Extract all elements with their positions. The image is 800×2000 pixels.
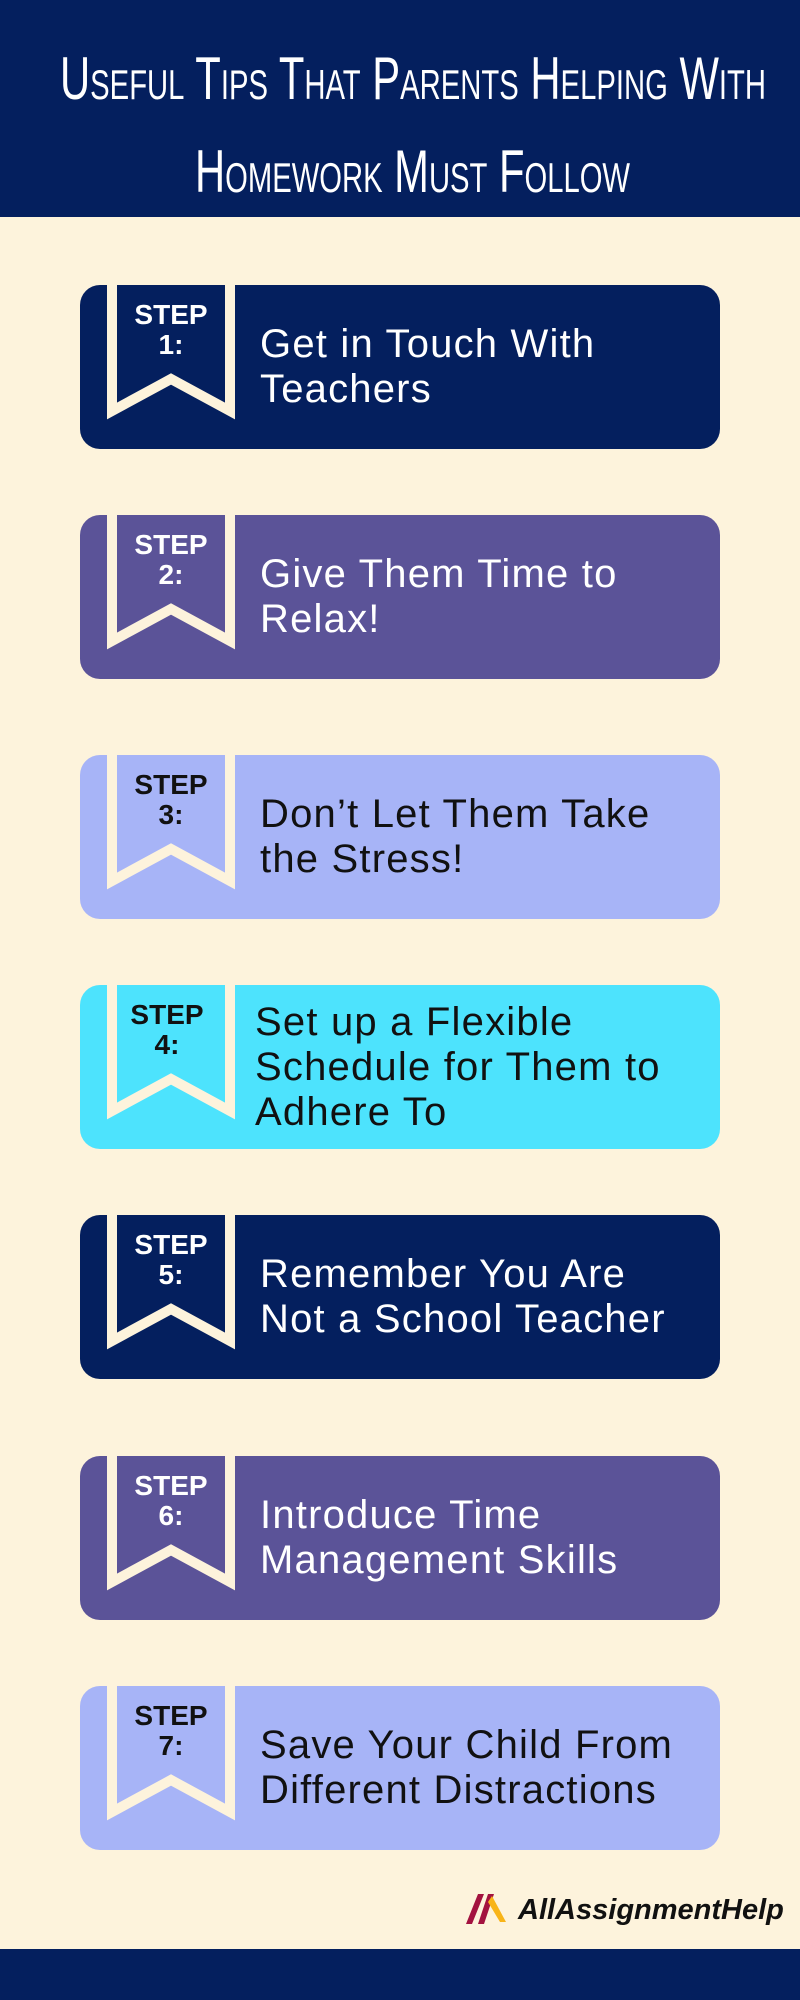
step label 7: 7:: [159, 1730, 183, 1761]
text 5: Not a School Teacher: [260, 1297, 666, 1341]
text 4: [255, 1000, 661, 1134]
card: step 6: [80, 1456, 720, 1620]
step label 7: STEP: [134, 1700, 208, 1731]
step label 4: 4:: [155, 1029, 179, 1060]
step label 6: [134, 1470, 208, 1531]
logo: [466, 1894, 784, 1926]
step label 2: 2:: [159, 559, 183, 590]
text 1: Teachers: [260, 367, 432, 411]
step label 4: STEP: [130, 999, 204, 1030]
text 2: [260, 552, 618, 641]
card: step 7: [80, 1686, 720, 1850]
footer bar: [0, 1949, 800, 2000]
ribbon 5: [107, 1215, 235, 1350]
step label 4: [130, 999, 204, 1060]
text 3: the Stress!: [260, 837, 464, 881]
icon: logo mark: [466, 1894, 506, 1924]
step label 5: [134, 1229, 208, 1290]
text 7: Save Your Child From: [260, 1723, 673, 1767]
text 1: [260, 322, 595, 411]
text 4: Adhere To: [255, 1090, 447, 1134]
text 2: Relax!: [260, 597, 381, 641]
text 5: [260, 1252, 666, 1341]
text 2: Give Them Time to: [260, 552, 618, 596]
card: step 5: [80, 1215, 720, 1379]
text 3: [260, 792, 650, 881]
step label 2: STEP: [134, 529, 208, 560]
card: step 4: [80, 985, 720, 1149]
step label 7: [134, 1700, 208, 1761]
step label 5: 5:: [159, 1259, 183, 1290]
text 5: Remember You Are: [260, 1252, 626, 1296]
ribbon 1: [107, 285, 235, 420]
card: step 1: [80, 285, 720, 449]
step label 5: STEP: [134, 1229, 208, 1260]
card: step 3: [80, 755, 720, 919]
text 7: [260, 1723, 673, 1812]
text 4: Set up a Flexible: [255, 1000, 573, 1044]
ribbon 4: [107, 985, 235, 1120]
step label 1: 1:: [159, 329, 183, 360]
text 4: Schedule for Them to: [255, 1044, 661, 1088]
step label 3: [134, 769, 208, 830]
logo text: AllAssignmentHelp: [518, 1894, 784, 1926]
text 3: Don’t Let Them Take: [260, 792, 650, 836]
step label 3: 3:: [159, 799, 183, 830]
ribbon 6: [107, 1456, 235, 1590]
text 1: Get in Touch With: [260, 322, 595, 366]
step label 3: STEP: [134, 769, 208, 800]
card: step 2: [80, 515, 720, 679]
step label 6: STEP: [134, 1470, 208, 1501]
step label 6: 6:: [159, 1500, 183, 1531]
text 6: Management Skills: [260, 1538, 618, 1582]
step label 2: [134, 529, 208, 590]
text 7: Different Distractions: [260, 1768, 657, 1812]
text 6: Introduce Time: [260, 1493, 541, 1537]
title: [60, 45, 766, 205]
text 6: [260, 1493, 618, 1582]
ribbon 3: [107, 755, 235, 890]
step label 1: STEP: [134, 299, 208, 330]
ribbon 2: [107, 515, 235, 650]
ribbon 7: [107, 1686, 235, 1820]
header: [0, 0, 800, 217]
step label 1: [134, 299, 208, 360]
